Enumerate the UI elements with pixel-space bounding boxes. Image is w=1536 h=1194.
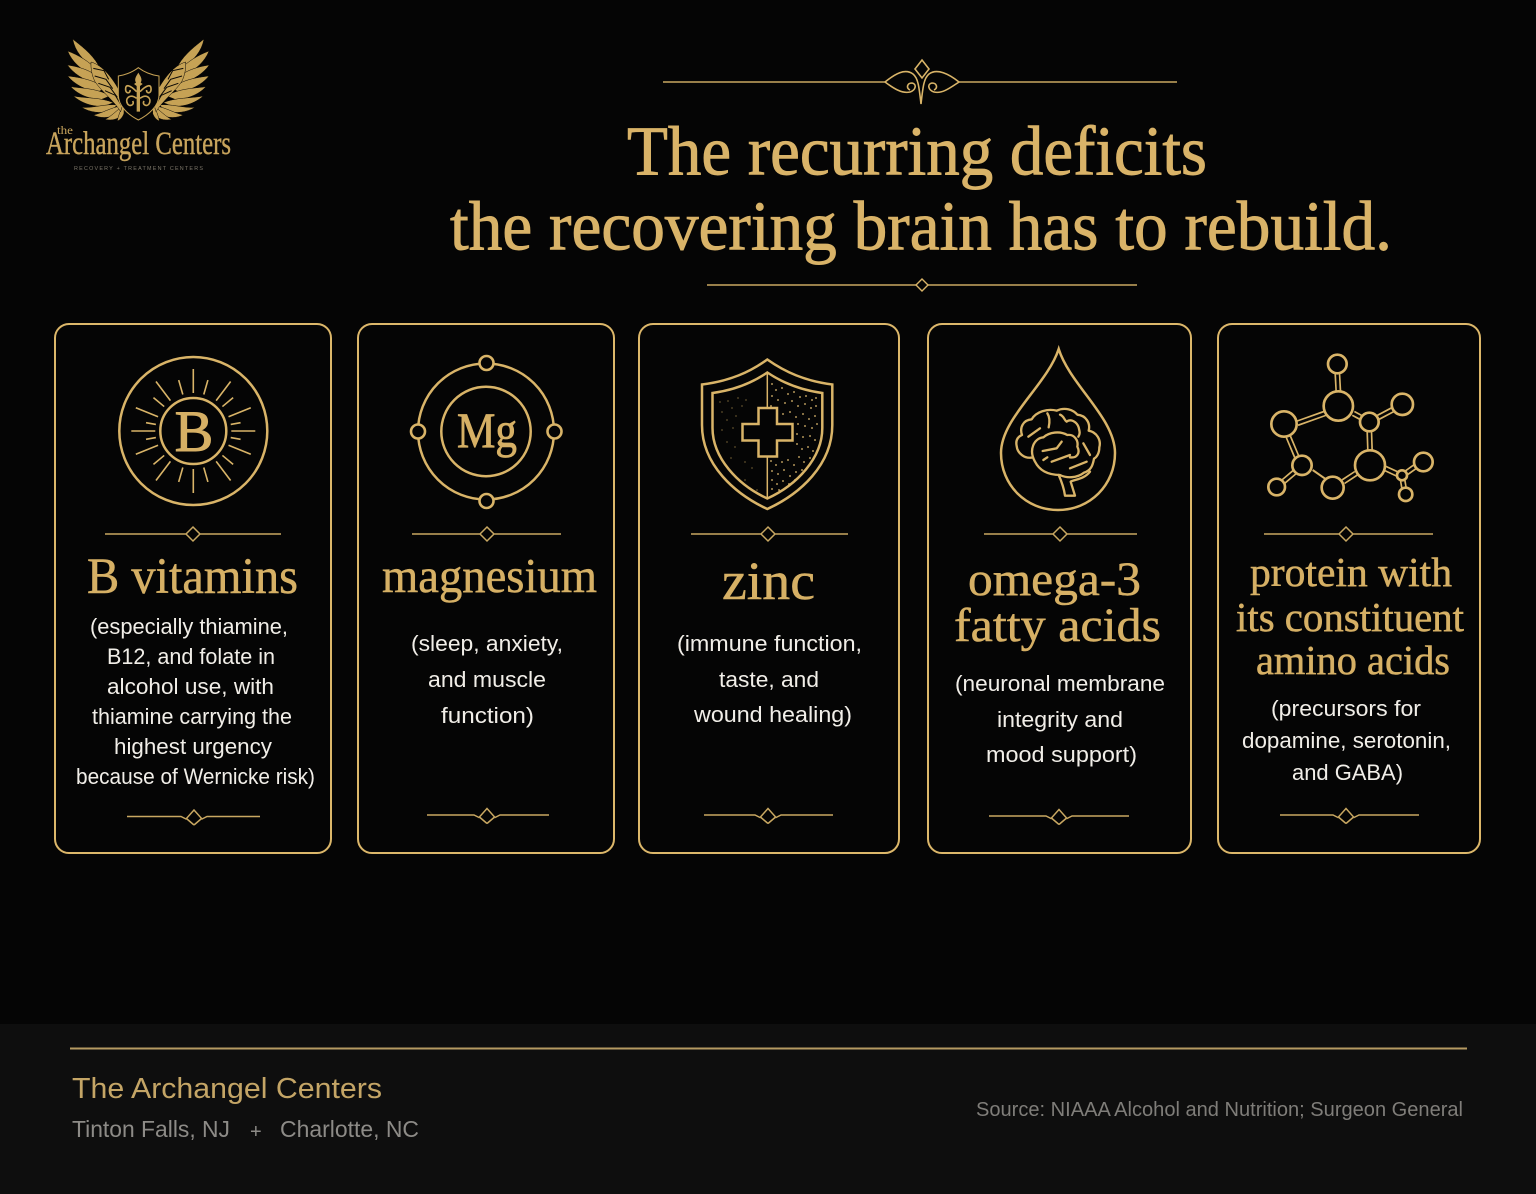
panel: protein [1218,324,1480,853]
description: mood support) [986,742,1137,767]
title rule [707,279,1137,291]
heading: B vitamins [87,549,298,605]
logo wordmark: Archangel Centers [46,126,231,162]
divider [984,527,1137,541]
ornament: top flourish [663,60,1177,104]
icon: B sunburst [119,357,267,505]
description [1242,696,1451,785]
logo wordmark [46,123,231,172]
title block [450,60,1392,291]
description: (precursors for [1271,696,1421,721]
panel: magnesium [358,324,614,853]
description: dopamine, serotonin, [1242,728,1451,753]
description: wound healing) [693,702,852,727]
description [677,631,862,727]
heading: magnesium [382,548,597,603]
icon: Mg atom [411,356,562,508]
ornament [989,810,1129,824]
description: (especially thiamine, [90,614,288,639]
description: integrity and [997,707,1123,732]
ornament [127,810,260,825]
description: (immune function, [677,631,862,656]
logo: The Archangel Centers [46,39,231,172]
footer [0,1024,1536,1194]
description [955,671,1165,767]
heading: protein with [1250,549,1452,595]
footer locations: + [250,1121,262,1143]
icon: winged shield [67,39,209,121]
heading: its constituent [1236,594,1465,640]
ornament [704,808,833,824]
description: thiamine carrying the [92,704,292,729]
description [411,631,563,728]
heading: omega-3 [968,553,1141,606]
icon: B sunburst: B [175,399,213,464]
description: highest urgency [114,734,272,759]
icon: drop with brain [1001,349,1115,510]
description: and muscle [428,667,546,692]
source note: Source: NIAAA Alcohol and Nutrition; Surgeon General [976,1099,1463,1121]
heading line 1: The recurring deficits [627,114,1207,190]
logo wordmark: the [57,123,73,137]
description: (neuronal membrane [955,671,1165,696]
description: alcohol use, with [107,674,274,699]
description: B12, and folate in [107,644,275,669]
description [76,614,315,789]
footer locations: Tinton Falls, NJ [72,1116,230,1142]
icon: shield [702,360,832,509]
divider [691,527,848,541]
ornament [1280,808,1419,824]
heading: zinc [722,551,815,611]
description: taste, and [719,667,819,692]
heading [954,553,1161,652]
footer organisation name: The Archangel Centers [72,1073,382,1105]
description: function) [441,703,534,728]
panel: zinc [639,324,899,853]
description: and GABA) [1292,760,1403,785]
shield speckles [771,384,817,490]
logo wordmark: RECOVERY + TREATMENT CENTERS [74,166,203,172]
divider [1264,527,1433,541]
footer locations: Charlotte, NC [280,1116,419,1142]
divider [105,527,281,541]
description: because of Wernicke risk) [76,764,315,789]
heading [1236,549,1465,683]
footer locations [72,1116,419,1143]
description: (sleep, anxiety, [411,631,563,656]
panel: B vitamins [55,324,331,853]
panel: omega-3 fatty acids [928,324,1191,853]
heading line 2: the recovering brain has to rebuild. [450,188,1392,266]
heading: amino acids [1256,637,1450,683]
heading: fatty acids [954,599,1161,652]
icon: Mg atom: Mg [457,402,517,458]
ornament [427,808,549,824]
divider [412,527,561,541]
icon: molecule [1268,355,1433,501]
